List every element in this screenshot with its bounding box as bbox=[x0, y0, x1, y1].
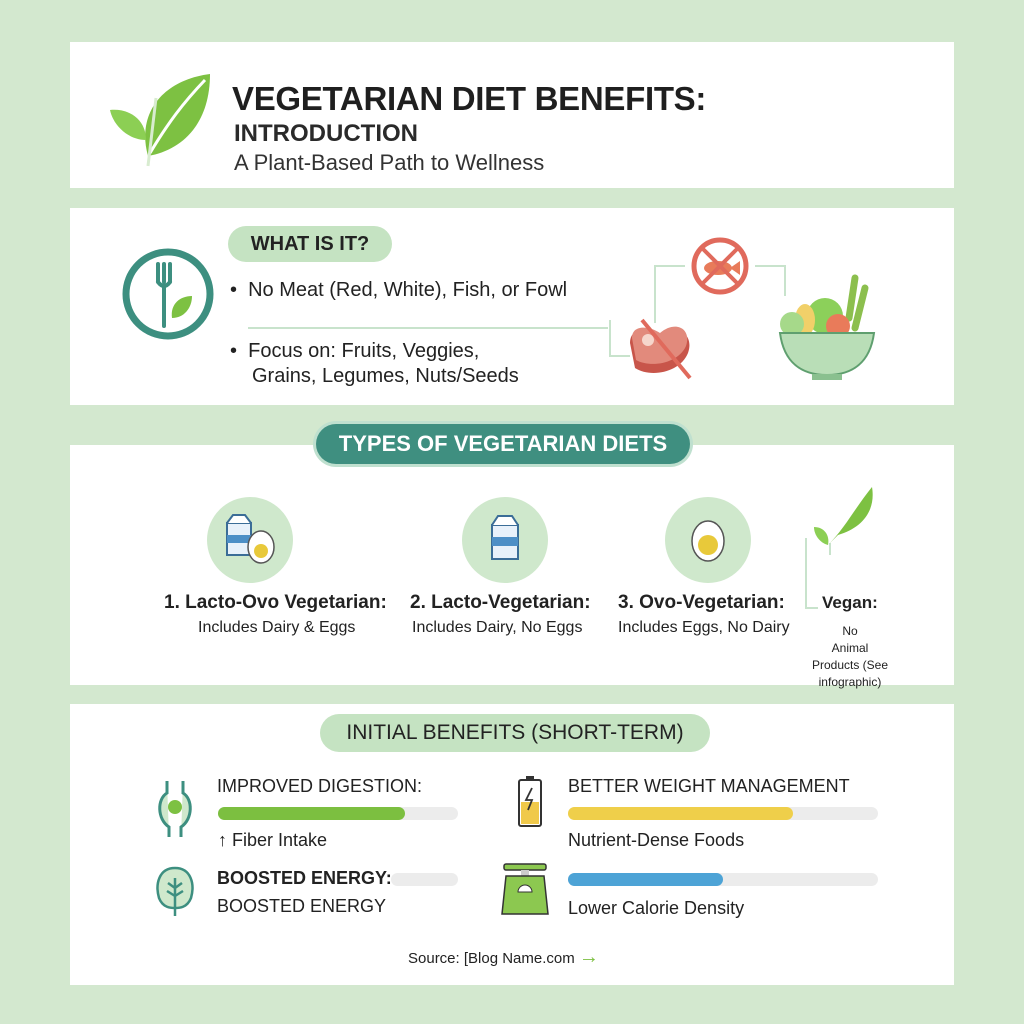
type 3: Includes Eggs, No Dairy bbox=[618, 619, 790, 636]
benefit: calorie bbox=[501, 863, 878, 918]
panel: header bbox=[70, 42, 954, 188]
bullet list: • No Meat (Red, White), Fish, or Fowl bbox=[230, 279, 567, 301]
benefit: weight: Nutrient-Dense Foods bbox=[568, 830, 744, 850]
type 2: 2. Lacto-Vegetarian: bbox=[410, 592, 591, 613]
heading pill bbox=[320, 714, 710, 752]
icon: fork bbox=[122, 248, 214, 340]
heading: types: TYPES OF VEGETARIAN DIETS bbox=[339, 431, 667, 456]
benefit: energy: BOOSTED ENERGY bbox=[217, 896, 386, 916]
benefit: weight bbox=[518, 776, 878, 850]
heading pill: INITIAL BENEFITS (SHORT-TERM) bbox=[346, 721, 684, 744]
bullet list: Grains, Legumes, Nuts/Seeds bbox=[252, 365, 519, 387]
bullet list bbox=[230, 279, 608, 387]
heading pill bbox=[228, 226, 392, 262]
panel: types bbox=[70, 445, 954, 685]
heading pill: WHAT IS IT? bbox=[251, 233, 369, 255]
subtitle: INTRODUCTION bbox=[234, 120, 418, 147]
benefit: calorie: Lower Calorie Density bbox=[568, 898, 744, 918]
benefit: digestion: IMPROVED DIGESTION: bbox=[217, 776, 422, 796]
panel: types: Products (See bbox=[812, 658, 888, 672]
icon: egg bbox=[665, 497, 751, 583]
icon: milk bbox=[462, 497, 548, 583]
type 2: Includes Dairy, No Eggs bbox=[412, 619, 582, 636]
vegan: Animal bbox=[832, 641, 868, 655]
vegan: No bbox=[842, 624, 858, 638]
type 2 bbox=[410, 497, 591, 636]
tagline: A Plant-Based Path to Wellness bbox=[234, 150, 544, 175]
benefit: energy bbox=[156, 866, 458, 916]
benefit: digestion: ↑ Fiber Intake bbox=[218, 830, 327, 850]
benefit: energy: BOOSTED ENERGY: bbox=[217, 868, 392, 888]
type 3: 3. Ovo-Vegetarian: bbox=[618, 592, 785, 613]
panel: what is it bbox=[70, 208, 954, 405]
type 3 bbox=[618, 497, 790, 636]
source: Source: [Blog Name.com → bbox=[408, 946, 599, 968]
type 1 bbox=[164, 497, 387, 636]
vegan: Vegan: bbox=[822, 593, 878, 612]
title: VEGETARIAN DIET BENEFITS: bbox=[232, 80, 706, 117]
icons: no meat, no fish, salad bbox=[609, 238, 876, 380]
bullet list: • Focus on: Fruits, Veggies, bbox=[230, 340, 479, 362]
benefit: digestion bbox=[158, 776, 458, 850]
vegan bbox=[805, 487, 888, 689]
icon: leaf bbox=[110, 74, 210, 166]
type 1: Includes Dairy & Eggs bbox=[198, 619, 355, 636]
panel: types: infographic) bbox=[819, 675, 881, 689]
icon: milk and egg bbox=[207, 497, 293, 583]
benefit: weight: BETTER WEIGHT MANAGEMENT bbox=[568, 776, 850, 796]
heading: types bbox=[316, 424, 690, 464]
panel: benefits bbox=[70, 704, 954, 985]
type 1: 1. Lacto-Ovo Vegetarian: bbox=[164, 592, 387, 613]
